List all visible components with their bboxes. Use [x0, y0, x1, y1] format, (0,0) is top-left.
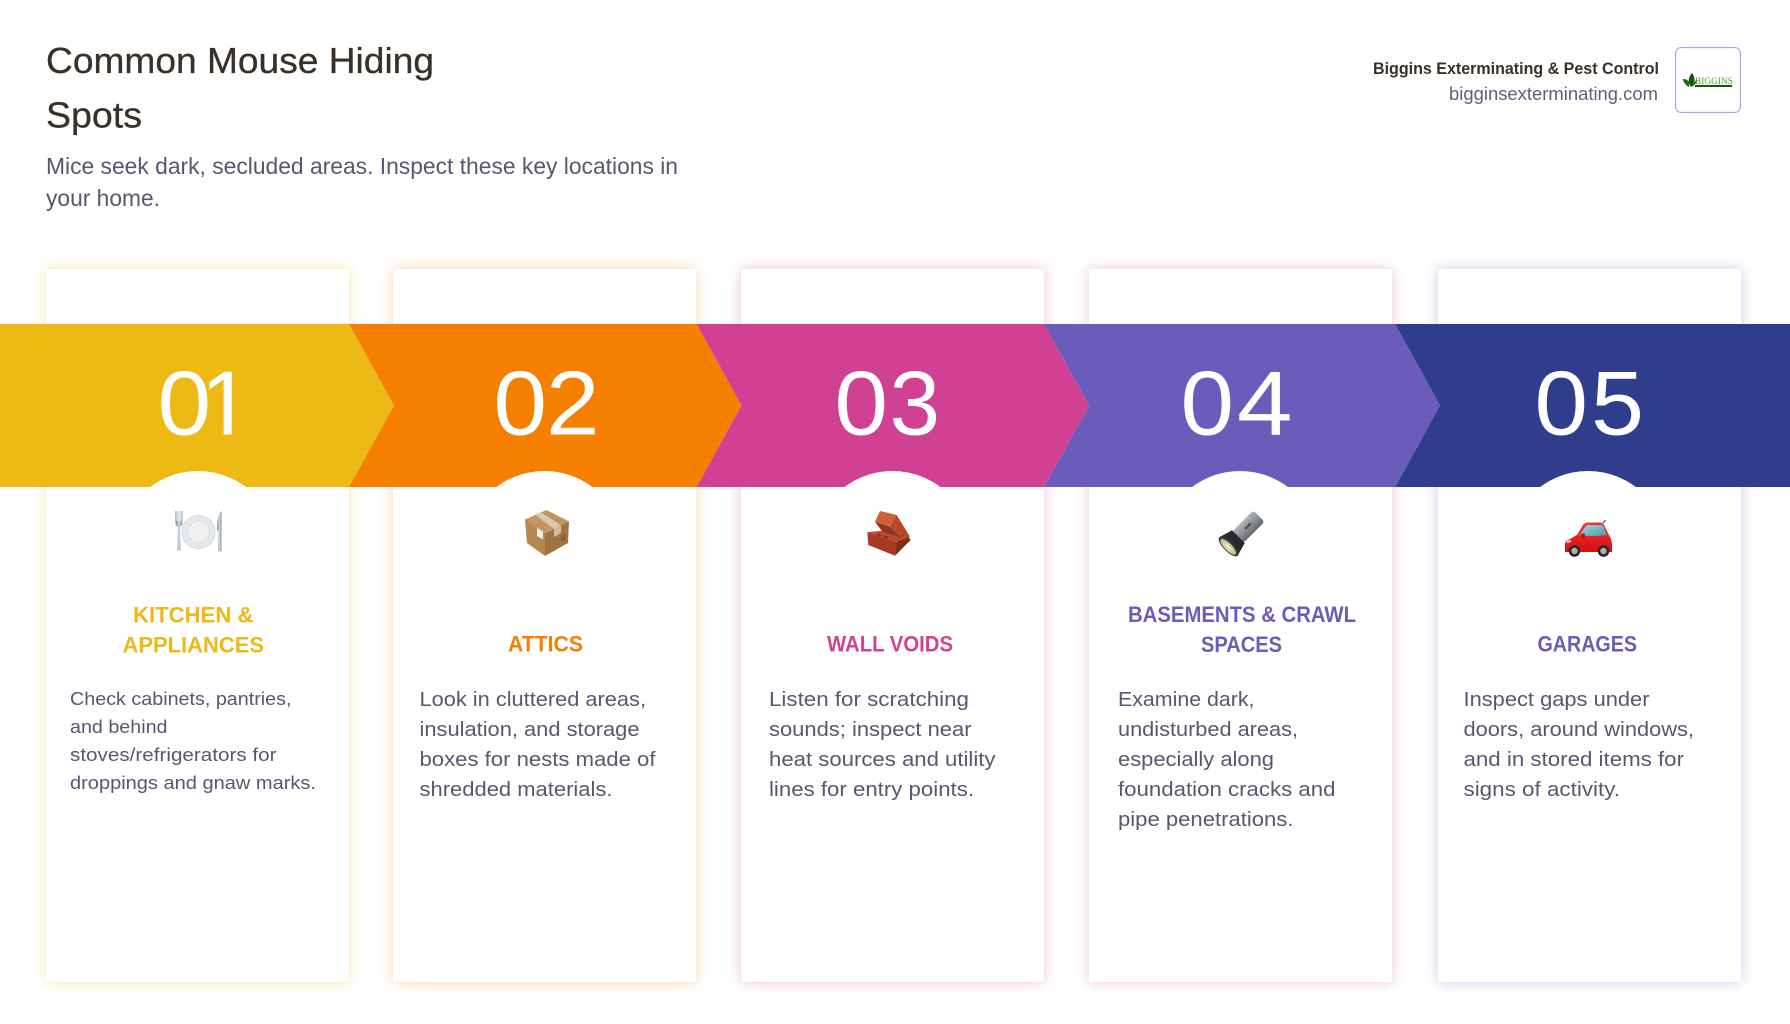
icon: brick: [867, 511, 911, 556]
company name and website: bigginsexterminating.com: [1449, 84, 1658, 104]
company name and website: Biggins Exterminating & Pest Control: [1373, 59, 1659, 78]
description: lines for entry points.: [769, 779, 974, 801]
number 02: 2: [546, 354, 600, 454]
description: Check cabinets, pantries,: [70, 688, 292, 709]
number 03: 3: [890, 354, 940, 454]
number 05: [1534, 354, 1644, 454]
description: [70, 688, 316, 793]
description: signs of activity.: [1464, 779, 1620, 801]
subtitle: Mice seek dark, secluded areas. Inspect these key locations in: [46, 153, 678, 179]
heading: KITCHEN &: [133, 602, 254, 628]
icon: cardboard box: [525, 510, 569, 556]
number 04: [1180, 354, 1292, 454]
icon: red car: [1565, 520, 1612, 557]
panel: card 5 background: [1438, 269, 1741, 982]
description: sounds; inspect near: [769, 719, 972, 741]
icon: plate with fork and knife: [176, 511, 222, 552]
description: [1118, 689, 1336, 831]
heading: [1128, 602, 1356, 657]
panel: card 1 background: [46, 269, 349, 982]
description: [1464, 689, 1694, 801]
company name and website: [1373, 59, 1659, 104]
title: Common Mouse Hiding: [46, 40, 434, 81]
heading: SPACES: [1201, 632, 1282, 657]
title: Spots: [46, 94, 142, 136]
description: droppings and gnaw marks.: [70, 772, 316, 793]
description: Inspect gaps under: [1464, 689, 1650, 711]
number 03: 0: [834, 354, 888, 454]
step 1: kitchen and appliances: [70, 354, 316, 793]
heading: WALL VOIDS: [827, 632, 953, 656]
number 02: [494, 354, 600, 454]
subtitle: your home.: [46, 185, 160, 211]
step 5: garages: [1464, 354, 1694, 801]
step 3: wall voids: [769, 354, 996, 801]
description: pipe penetrations.: [1118, 809, 1294, 831]
description: and behind: [70, 716, 168, 737]
heading: [122, 602, 264, 658]
arrow band: five chevrons: [0, 324, 1790, 487]
number 01: [158, 354, 251, 454]
number 01: 1: [201, 354, 251, 454]
description: Examine dark,: [1118, 689, 1254, 711]
number 01: 0: [158, 354, 211, 454]
number 02: 0: [494, 354, 547, 454]
description: foundation cracks and: [1118, 779, 1336, 801]
step 4: basements and crawl spaces: [1118, 354, 1356, 831]
number 04: 0: [1180, 354, 1234, 454]
heading: ATTICS: [508, 632, 583, 656]
description: and in stored items for: [1464, 749, 1684, 771]
number 04: 4: [1237, 354, 1292, 454]
step 2: attics: [420, 354, 656, 801]
description: undisturbed areas,: [1118, 719, 1298, 741]
number 05: 5: [1591, 354, 1644, 454]
description: doors, around windows,: [1464, 719, 1694, 741]
number 03: [834, 354, 940, 454]
heading: BASEMENTS & CRAWL: [1128, 602, 1356, 627]
title: [46, 40, 434, 136]
description: insulation, and storage: [420, 719, 640, 741]
description: [420, 689, 656, 801]
description: especially along: [1118, 749, 1274, 771]
logo: BIGGINS: [1695, 77, 1733, 87]
description: [769, 689, 996, 801]
icon: flashlight: [1216, 507, 1268, 559]
description: shredded materials.: [420, 779, 612, 801]
panel: card 2 background: [393, 269, 696, 982]
description: Look in cluttered areas,: [420, 689, 646, 711]
panel: card 3 background: [741, 269, 1044, 982]
number 05: 0: [1534, 354, 1588, 454]
description: Listen for scratching: [769, 689, 969, 711]
heading: GARAGES: [1538, 632, 1637, 656]
panel: card 4 background: [1089, 269, 1392, 982]
logo: [1676, 48, 1740, 112]
description: stoves/refrigerators for: [70, 744, 276, 765]
subtitle: [46, 153, 678, 211]
description: heat sources and utility: [769, 749, 996, 771]
heading: APPLIANCES: [122, 632, 264, 658]
description: boxes for nests made of: [420, 749, 656, 771]
